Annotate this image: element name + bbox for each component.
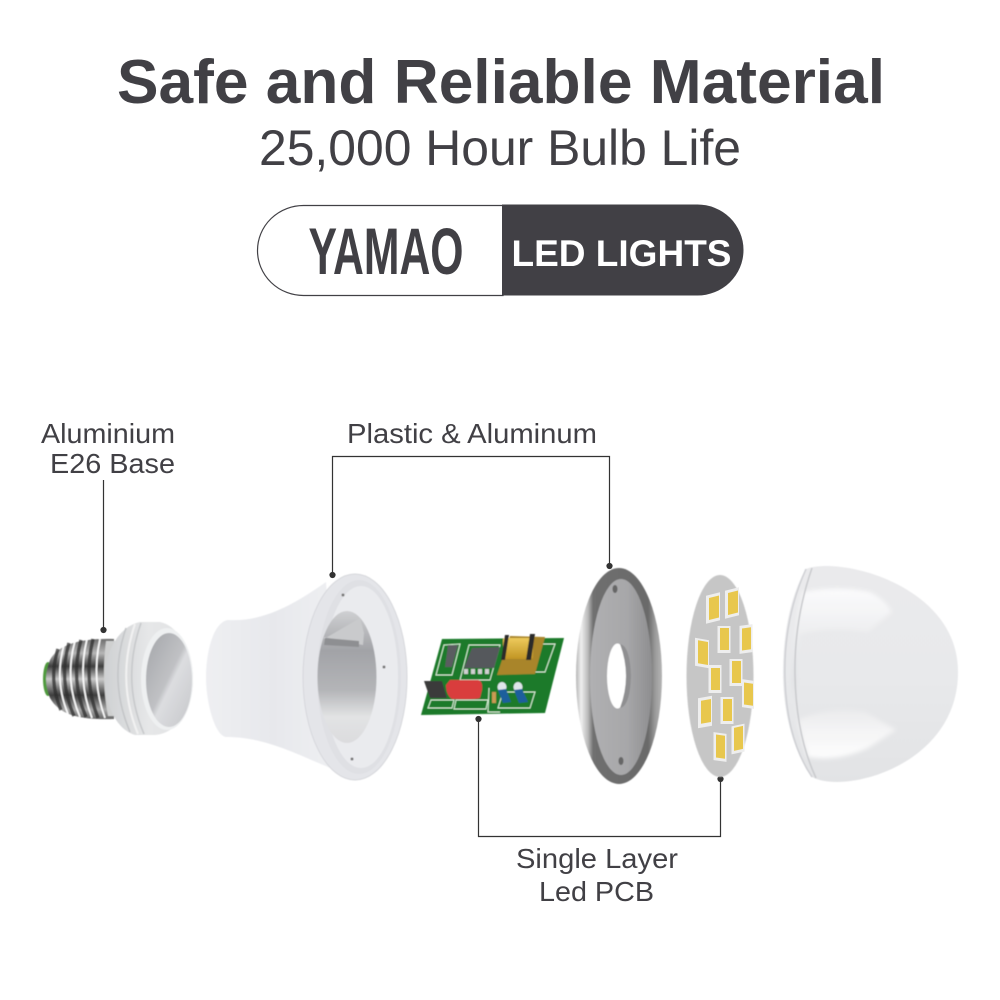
leader line: driver board to LED board (476, 716, 723, 836)
label: Single Layer Led PCB: Led PCB (539, 876, 654, 907)
icon: LED PCB disc (686, 575, 754, 777)
collar (105, 622, 193, 735)
label: Single Layer Led PCB (516, 843, 678, 907)
round board (686, 575, 754, 777)
icon: glass dome (783, 566, 958, 782)
collar mouth (141, 628, 193, 730)
housing rim (303, 574, 407, 780)
dome rim (785, 569, 812, 777)
brand badge: white part with YAMAO logo (258, 205, 503, 296)
label: Aluminium E26 Base: Aluminium (41, 418, 175, 449)
label: Aluminium E26 Base (41, 418, 175, 479)
brand badge: dark part with LED LIGHTS: LED LIGHTS (512, 233, 732, 274)
title: Safe and Reliable Material (117, 48, 885, 117)
black connector (424, 681, 447, 698)
label: Aluminium E26 Base: E26 Base (50, 448, 175, 479)
leader line: housing to plate (330, 456, 612, 578)
icon: driver circuit board (421, 634, 564, 715)
screw points (342, 594, 344, 596)
green board (421, 638, 564, 715)
blue capacitors (498, 682, 506, 692)
chip (445, 645, 458, 667)
outer ring (576, 568, 662, 784)
plate face (590, 579, 652, 775)
icon: plastic housing (206, 574, 407, 780)
dome reflection (793, 588, 896, 758)
housing body (206, 582, 340, 772)
brand badge: white part with YAMAO logo: YAMAO (308, 214, 464, 288)
LED chips (695, 587, 754, 762)
dome body (783, 566, 958, 782)
icon: metal plate (576, 568, 662, 784)
leader line: base (101, 480, 106, 632)
housing inner opening (318, 611, 376, 743)
screw cap contact (43, 662, 53, 696)
subtitle: 25,000 Hour Bulb Life (259, 120, 741, 176)
transformer (497, 636, 545, 675)
icon: E26 screw base (43, 622, 193, 735)
metal thread (46, 639, 114, 719)
brand badge: dark part with LED LIGHTS (502, 204, 744, 296)
center hole (607, 644, 628, 708)
label: Plastic & Aluminum: Plastic & Aluminum (347, 418, 597, 449)
mounting marks (612, 585, 618, 593)
label: Single Layer Led PCB: Single Layer (516, 843, 678, 874)
red capacitor (446, 680, 482, 699)
brand badge (258, 204, 744, 296)
resistors (492, 692, 496, 703)
